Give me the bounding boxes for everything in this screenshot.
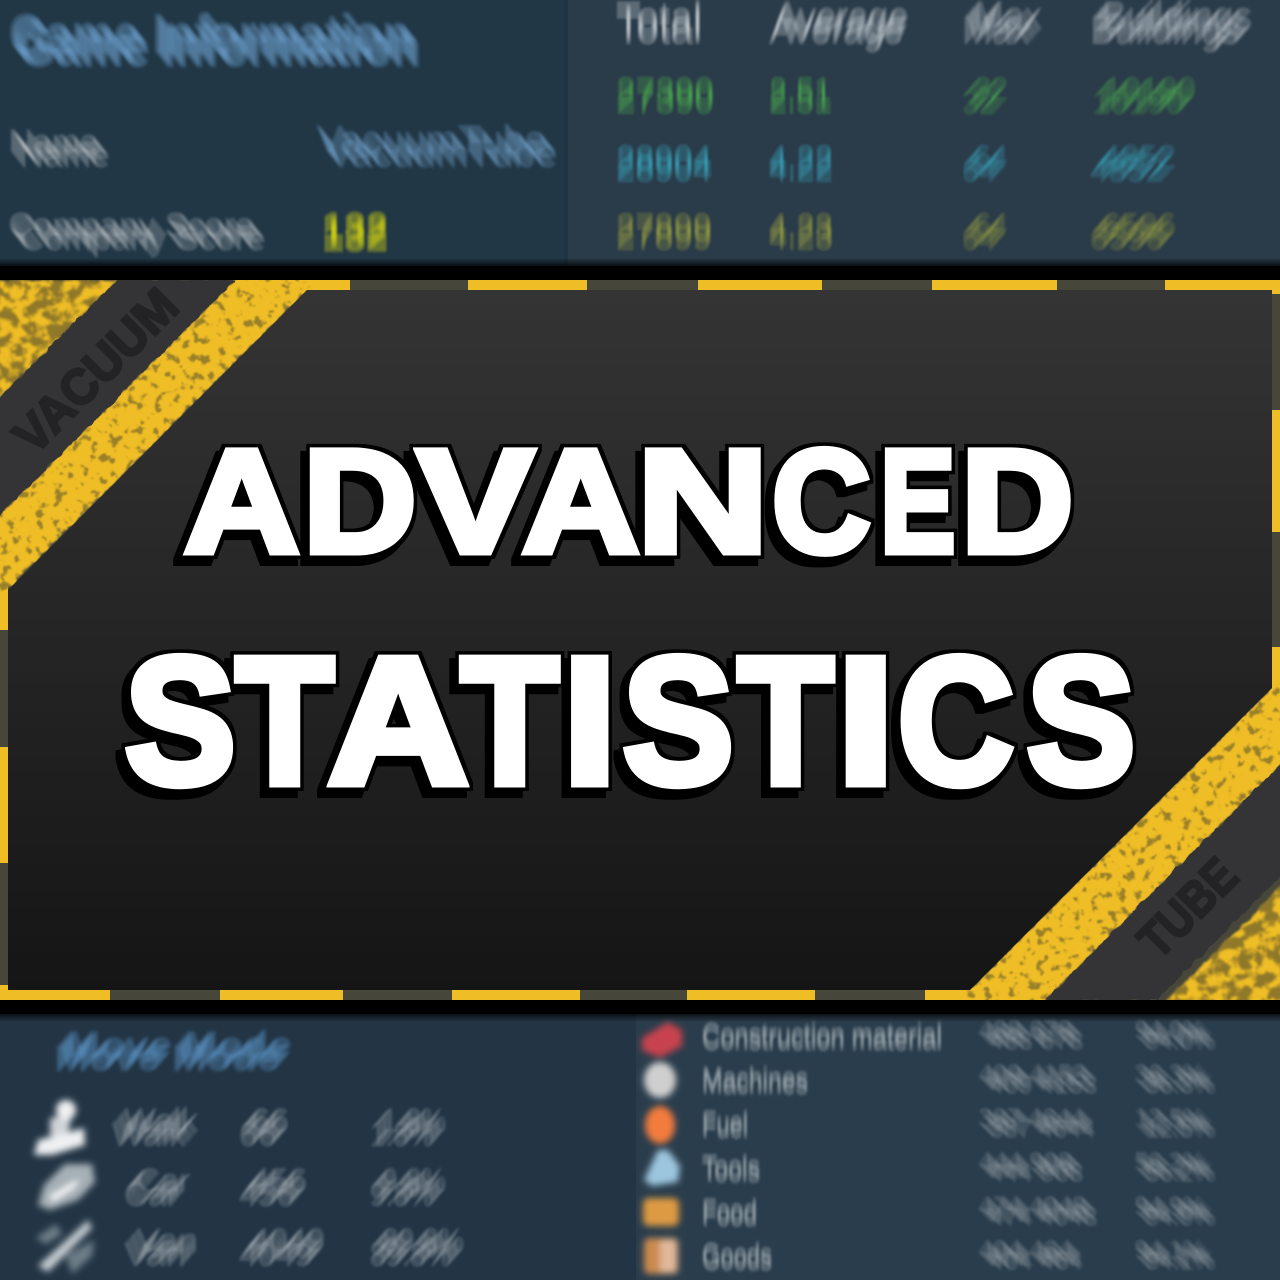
panel: move mode background: [0, 1014, 1280, 1280]
icon: goods box: [644, 1238, 678, 1274]
table header: statistics columns: Max: [968, 0, 1036, 46]
table row: cyan values: 64: [968, 145, 1002, 182]
table row: cyan values: [616, 145, 1170, 182]
table row: food: 94.9%: [1140, 1196, 1210, 1226]
text block: company score row: [14, 212, 388, 254]
table header: statistics columns: Total: [616, 0, 702, 46]
text block: name row: VacuumTube: [322, 125, 552, 169]
text block: walk row: Walk: [118, 1109, 193, 1147]
title line: STATISTICS: T: [236, 621, 334, 822]
table row: tools: Tools: [702, 1151, 760, 1186]
title line: STATISTICS: S: [623, 621, 733, 822]
title line: ADVANCED: A: [184, 420, 299, 584]
text block: company score row: 132: [322, 212, 388, 254]
icon: brick: [642, 1022, 682, 1058]
title line: STATISTICS: S: [1027, 621, 1135, 822]
tape band: bottom right: [1045, 755, 1280, 1000]
title line: STATISTICS: T: [461, 621, 559, 822]
table row: cyan values: 4.22: [769, 145, 833, 182]
table row: green values: 32: [968, 77, 1002, 114]
tape stripe: bottom right: [966, 686, 1280, 1000]
table row: fuel: 387 4644: [984, 1108, 1090, 1138]
table row: goods: 94.1%: [1140, 1240, 1210, 1270]
table row: construction material: Construction material: [702, 1019, 942, 1054]
text block: walk row: [118, 1109, 440, 1147]
title line: ADVANCED: A: [522, 420, 639, 584]
table row: food: [702, 1195, 1210, 1230]
tape stripe: top left: [0, 280, 310, 592]
tape corner: top left: [0, 280, 117, 407]
table row: construction material: [702, 1019, 1210, 1054]
text block: van row: 89.8%: [376, 1229, 458, 1267]
table row: fuel: 12.5%: [1140, 1108, 1210, 1138]
icon: airplane: [36, 1220, 94, 1274]
icon: tool: [644, 1150, 680, 1186]
table row: green values: [616, 77, 1190, 114]
text block: name row: Name: [14, 130, 104, 168]
title line: STATISTICS: I: [563, 621, 617, 822]
icon: walking figure: [34, 1100, 85, 1155]
table row: food: 474 4048: [984, 1196, 1092, 1226]
hazard frame dashes: [0, 280, 1280, 1000]
text block: car row: [130, 1169, 440, 1207]
tape band: top left: [0, 280, 235, 525]
text block: name row: [14, 125, 552, 169]
table header: statistics columns: [616, 0, 1246, 46]
title line: ADVANCED: D: [302, 420, 416, 584]
title line: ADVANCED: E: [880, 420, 956, 584]
table row: machines: [702, 1063, 1210, 1098]
table row: fuel: [702, 1107, 1210, 1142]
tape label: TUBE: TUBE: [1127, 847, 1249, 969]
title line: STATISTICS: A: [328, 621, 468, 822]
table row: goods: 404 464: [984, 1240, 1078, 1270]
icon: gear: [644, 1062, 676, 1098]
icon: food: [643, 1198, 679, 1226]
table row: construction material: 488 678: [984, 1020, 1078, 1050]
text block: van row: [130, 1229, 458, 1267]
tape corner: bottom right: [1166, 885, 1280, 1000]
text block: car row: 456: [245, 1169, 301, 1207]
table row: olive values: 6596: [1096, 213, 1170, 250]
table row: tools: 444 908: [984, 1152, 1078, 1182]
table row: olive values: 4.23: [769, 213, 833, 250]
text block: car row: Car: [130, 1169, 184, 1207]
table header: statistics columns: Average: [772, 0, 906, 46]
table row: green values: 27390: [616, 77, 714, 114]
table row: cyan values: 4852: [1096, 145, 1170, 182]
panel: hazard tape banner: [0, 270, 1280, 1010]
table row: green values: 10190: [1098, 77, 1190, 114]
heading: game information: Game Information: [14, 9, 416, 73]
dark center panel: [8, 290, 1272, 990]
panel: game information background: [0, 0, 1280, 266]
text block: van row: Van: [130, 1229, 192, 1267]
table row: cyan values: 28904: [616, 145, 712, 182]
icon: flame: [645, 1106, 675, 1144]
table header: statistics columns: Buildings: [1096, 0, 1246, 46]
title line: STATISTICS: S: [125, 621, 235, 822]
title line: STATISTICS: T: [738, 621, 834, 822]
title line: ADVANCED: V: [416, 420, 533, 584]
table row: food: Food: [702, 1195, 757, 1230]
title line: STATISTICS: C: [898, 621, 1014, 822]
table row: goods: Goods: [702, 1239, 772, 1274]
table row: machines: Machines: [702, 1063, 808, 1098]
title line: ADVANCED: C: [772, 420, 870, 584]
icon: car: [38, 1164, 95, 1210]
table row: tools: [702, 1151, 1210, 1186]
title line: STATISTICS: [116, 621, 1136, 822]
table row: tools: 56.2%: [1140, 1152, 1210, 1182]
table row: olive values: 64: [968, 213, 1002, 250]
table row: machines: 409 4153: [984, 1064, 1092, 1094]
table row: fuel: Fuel: [702, 1107, 748, 1142]
table row: machines: 36.3%: [1140, 1064, 1210, 1094]
table row: green values: 2.51: [769, 77, 832, 114]
text block: company score row: Company Score: [14, 213, 260, 250]
title line: ADVANCED: [173, 420, 1074, 584]
title line: ADVANCED: N: [637, 420, 769, 584]
table row: goods: [702, 1239, 1210, 1274]
title line: ADVANCED: D: [961, 420, 1073, 584]
text block: car row: 9.8%: [376, 1169, 440, 1207]
title line: STATISTICS: I: [837, 621, 895, 822]
table row: olive values: 27899: [616, 213, 712, 250]
heading: move mode: Move Mode: [60, 1031, 286, 1072]
text block: walk row: 1.8%: [376, 1109, 440, 1147]
table row: construction material: 94.0%: [1140, 1020, 1210, 1050]
table row: olive values: [616, 213, 1170, 250]
text block: van row: 4049: [245, 1229, 319, 1267]
text block: walk row: 66: [245, 1109, 283, 1147]
tape label: VACUUM: VACUUM: [2, 277, 189, 464]
